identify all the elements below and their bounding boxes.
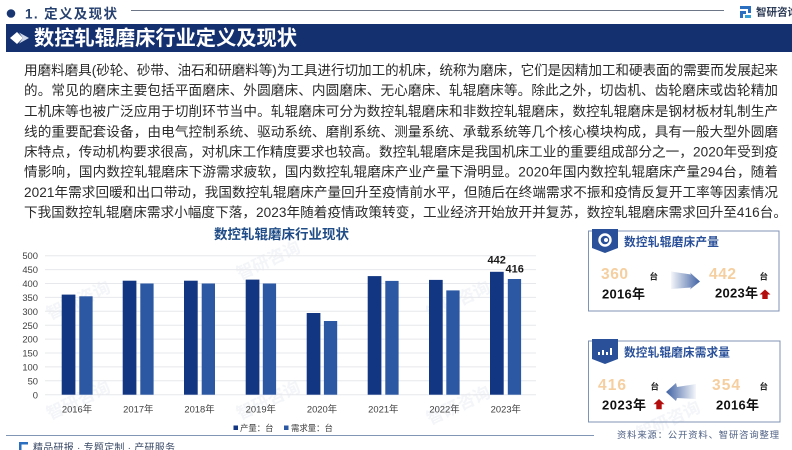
panel: demand: 2016年 bbox=[716, 398, 759, 412]
y axis labels bbox=[22, 250, 38, 400]
chart legend bbox=[234, 423, 333, 433]
chart legend: 需求量：台 bbox=[291, 423, 333, 433]
panel: production: 数控轧辊磨床产量 bbox=[624, 235, 719, 249]
logo bbox=[740, 6, 792, 18]
panel: production: 2023年 bbox=[715, 286, 758, 300]
data labels bbox=[488, 254, 524, 276]
body paragraph: 用磨料磨具(砂轮、砂带、油石和研磨料等)为工具进行切加工的机床，统称为磨床，它们是因精加工和硬表面的需要而发展起来 bbox=[24, 62, 778, 78]
section heading: 1. 定义及现状 bbox=[25, 6, 118, 22]
y axis labels: 200 bbox=[22, 334, 38, 344]
x axis labels bbox=[62, 404, 521, 414]
arrow bbox=[671, 272, 700, 290]
chart legend: 产量：台 bbox=[240, 423, 274, 433]
body paragraph bbox=[24, 62, 787, 220]
watermark: 智研咨询 bbox=[43, 377, 113, 424]
icon: red up arrow bbox=[760, 290, 770, 299]
chart title: 数控轧辊磨床行业现状 bbox=[214, 226, 350, 242]
panel: production: 360 bbox=[601, 266, 628, 283]
y axis labels: 250 bbox=[22, 320, 38, 331]
watermark bbox=[43, 237, 703, 444]
panel: production: 台 bbox=[650, 272, 658, 282]
panel: production bbox=[588, 229, 779, 311]
x axis labels: 2023年 bbox=[491, 404, 521, 414]
x axis labels: 2020年 bbox=[307, 404, 337, 414]
icon: red up arrow bbox=[654, 399, 664, 409]
panel: production: 442 bbox=[709, 266, 736, 283]
data labels: 442 bbox=[488, 254, 506, 266]
x axis labels: 2021年 bbox=[368, 404, 398, 414]
icon: demand tab bbox=[592, 339, 618, 364]
data labels: 416 bbox=[506, 264, 524, 276]
y axis labels: 50 bbox=[28, 376, 38, 386]
x axis labels: 2018年 bbox=[184, 404, 215, 414]
panel: demand: 台 bbox=[760, 382, 768, 392]
body paragraph: 床特点，传动机构要求很高，对机床工作精度要求也较高。数控轧辊磨床是我国机床工业的重要组成部分之一，2020年受到疫 bbox=[24, 144, 778, 160]
panel: demand: 2023年 bbox=[602, 398, 646, 412]
y axis labels: 400 bbox=[22, 278, 38, 289]
panel: demand bbox=[588, 339, 780, 422]
y axis labels: 500 bbox=[22, 250, 38, 261]
panel: demand: 数控轧辊磨床需求量 bbox=[624, 346, 730, 360]
watermark: 智研咨询 bbox=[233, 237, 303, 284]
body paragraph: 线的重要配套设备，由电气控制系统、驱动系统、磨削系统、测量系统、承载系统等几个核心模块构成，具有一般大型外圆磨 bbox=[24, 124, 778, 140]
icon: production tab bbox=[592, 229, 618, 253]
watermark: 智研咨询 bbox=[633, 397, 703, 444]
x axis labels: 2019年 bbox=[246, 404, 276, 414]
x axis labels: 2022年 bbox=[429, 404, 460, 414]
panel: demand: 台 bbox=[650, 382, 659, 392]
panel: production: 2016年 bbox=[602, 286, 645, 302]
y axis labels: 350 bbox=[22, 292, 38, 303]
panel: demand: 416 bbox=[598, 377, 626, 394]
watermark: 智研咨询 bbox=[423, 277, 493, 324]
panel: production: 台 bbox=[760, 272, 768, 282]
watermark: 智研咨询 bbox=[233, 377, 303, 424]
y axis labels: 0 bbox=[33, 390, 38, 400]
source note: 资料来源：公开资料、智研咨询整理 bbox=[617, 429, 779, 440]
y axis labels: 150 bbox=[22, 348, 38, 358]
body paragraph: 2021年需求回暖和出口带动，我国数控轧辊磨床产量回升至疫情前水平，但随后在终端需求不振和疫情反复开工率等因素情况 bbox=[24, 184, 778, 200]
watermark: 智研咨询 bbox=[43, 277, 113, 324]
y axis labels: 100 bbox=[22, 362, 38, 372]
x axis labels: 2016年 bbox=[62, 404, 92, 414]
demand bars bbox=[79, 279, 521, 395]
body paragraph: 情影响，国内数控轧辊磨床下游需求疲软，国内数控轧辊磨床产业产量下滑明显。2020年国内数控轧辊磨床产量294台，随着 bbox=[24, 164, 778, 180]
y axis labels: 450 bbox=[22, 264, 38, 275]
title banner: 数控轧辊磨床行业定义及现状 bbox=[34, 26, 297, 50]
arrow bbox=[666, 383, 696, 401]
bar chart bbox=[22, 250, 536, 433]
body paragraph: 下我国数控轧辊磨床需求小幅度下落，2023年随着疫情政策转变，工业经济开始放开并复苏，数控轧辊磨床需求回升至416台。 bbox=[24, 204, 787, 220]
production bars bbox=[62, 272, 504, 395]
x axis labels: 2017年 bbox=[123, 404, 153, 414]
title banner bbox=[6, 24, 792, 52]
body paragraph: 的。常见的磨床主要包括平面磨床、外圆磨床、内圆磨床、无心磨床、轧辊磨床等。除此之外，切齿机、齿轮磨床或齿轮精加 bbox=[24, 82, 778, 98]
panel: demand: 354 bbox=[712, 377, 740, 394]
y axis labels: 300 bbox=[22, 306, 38, 317]
body paragraph: 工机床等也被广泛应用于切削环节当中。轧辊磨床可分为数控轧辊磨床和非数控轧辊磨床，数控轧辊磨床是钢材板材轧制生产 bbox=[24, 103, 778, 119]
watermark: 智研咨询 bbox=[423, 382, 493, 429]
